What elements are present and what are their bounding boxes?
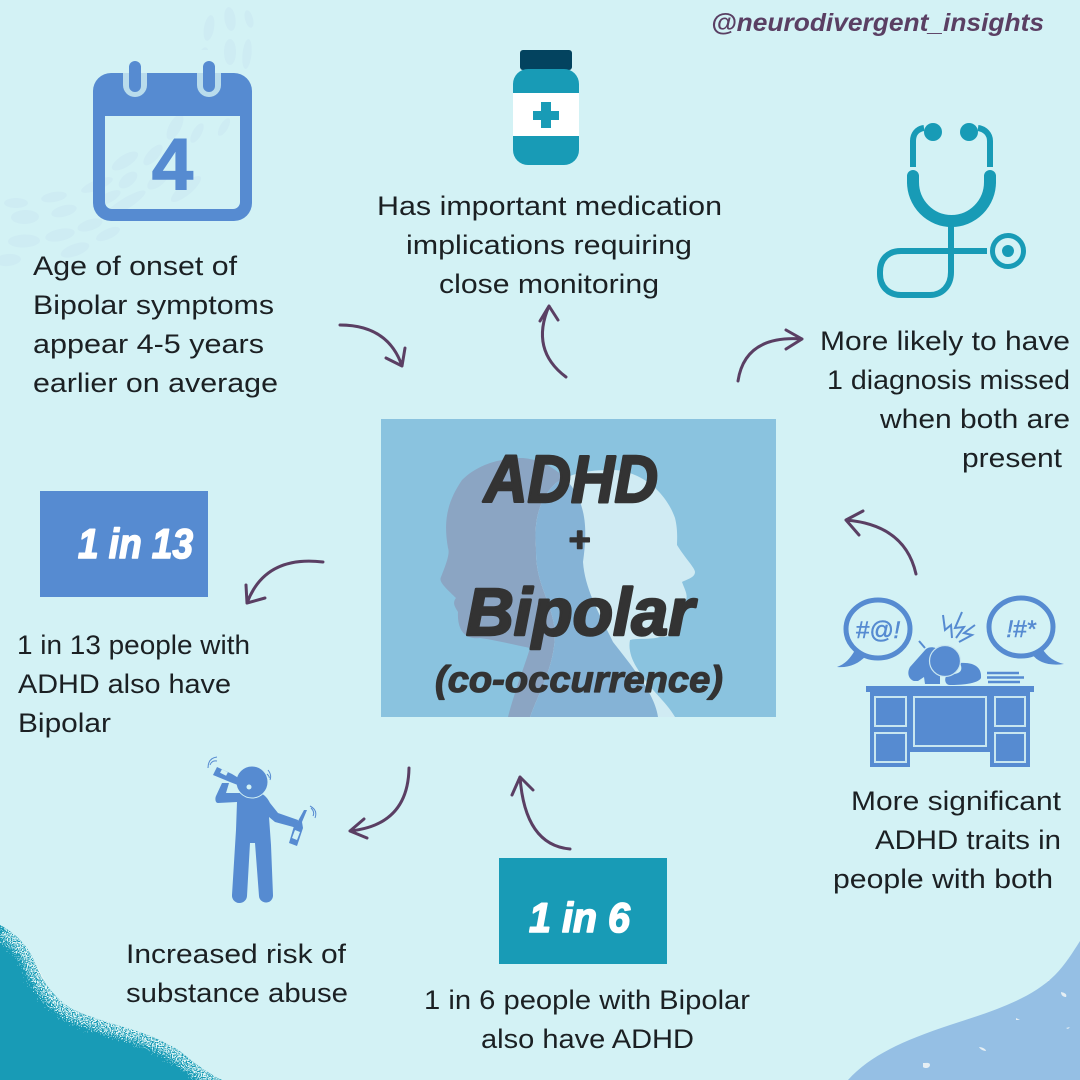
stat box: 1 in 13 [40, 491, 208, 597]
heading: co-occurrence: (co-occurrence) [435, 659, 723, 700]
text: substance abuse: Increased risk of [126, 939, 347, 969]
text: age of onset: earlier on average [33, 368, 278, 398]
arrow: to 1 in 13 [246, 561, 323, 603]
text: medication implications: implications requiring [406, 230, 692, 260]
speech bubble left [837, 600, 910, 667]
decoration: teal speckled corner blob [0, 925, 230, 1080]
desk [866, 686, 1034, 767]
text: 1 in 6: 1 in 6 people with Bipolar [424, 985, 750, 1015]
text: medication implications [377, 191, 722, 299]
text: ADHD traits: ADHD traits in [875, 825, 1061, 855]
silhouette: head overlap [530, 480, 658, 717]
decorative brush dashes [0, 6, 255, 267]
text: medication implications: close monitoring [439, 269, 659, 299]
text: age of onset: Bipolar symptoms [33, 290, 274, 320]
frustration bolts [943, 612, 975, 642]
text: 1 in 13: Bipolar [18, 708, 111, 738]
text: missed diagnosis: when both are [879, 404, 1070, 434]
icon: stethoscope [880, 123, 1024, 295]
silhouette: light head [530, 470, 695, 717]
text: medication implications: Has important medication [377, 191, 722, 221]
silhouette: dark head [440, 458, 658, 717]
stat box: 1 in 13: 1 in 13 [78, 520, 193, 567]
arrow: to substance abuse [350, 768, 409, 838]
text: missed diagnosis [820, 326, 1070, 473]
speech bubble right [989, 598, 1064, 665]
text: 1 in 6: also have ADHD [481, 1024, 694, 1054]
arrow: from traits [846, 511, 916, 574]
panel: central title [381, 419, 776, 717]
icon: medicine bottle [513, 50, 579, 165]
text: substance abuse [126, 939, 348, 1008]
arrow: from 1 in 6 [512, 777, 570, 849]
stat box: 1 in 6 [499, 858, 667, 964]
speech bubble right: !#* [1006, 616, 1036, 643]
text: 1 in 13 [17, 630, 250, 738]
text: missed diagnosis: More likely to have [820, 326, 1070, 356]
arrow: to age of onset [340, 325, 405, 366]
heading: Bipolar: Bipolar [466, 575, 698, 650]
text: age of onset: Age of onset of [33, 251, 238, 281]
text: ADHD traits: More significant [851, 786, 1062, 816]
text: 1 in 6 [424, 985, 750, 1054]
text: age of onset [33, 251, 278, 398]
decoration: blue corner blob [848, 941, 1080, 1080]
slumped figure [908, 647, 940, 684]
handle: @neurodivergent_insights [711, 9, 1044, 37]
stat box: 1 in 6: 1 in 6 [529, 894, 631, 941]
text: ADHD traits [833, 786, 1062, 894]
text: substance abuse: substance abuse [126, 978, 348, 1008]
icon: person at desk [837, 598, 1064, 767]
arrow: to medication [540, 306, 566, 377]
icon: person drinking [208, 757, 316, 903]
papers [987, 673, 1024, 682]
text: missed diagnosis: present [962, 443, 1063, 473]
text: 1 in 13: ADHD also have [18, 669, 231, 699]
speech bubble left: #@! [856, 617, 901, 644]
icon: calendar: 4 [152, 125, 193, 205]
text: age of onset: appear 4-5 years [33, 329, 264, 359]
heading: ADHD: ADHD [482, 442, 658, 517]
text: ADHD traits: people with both [833, 864, 1053, 894]
text: missed diagnosis: 1 diagnosis missed [827, 365, 1070, 395]
text: 1 in 13: 1 in 13 people with [17, 630, 250, 660]
heading: plus: + [568, 521, 590, 559]
icon: calendar [93, 50, 252, 221]
arrow: to missed diagnosis [738, 330, 802, 381]
